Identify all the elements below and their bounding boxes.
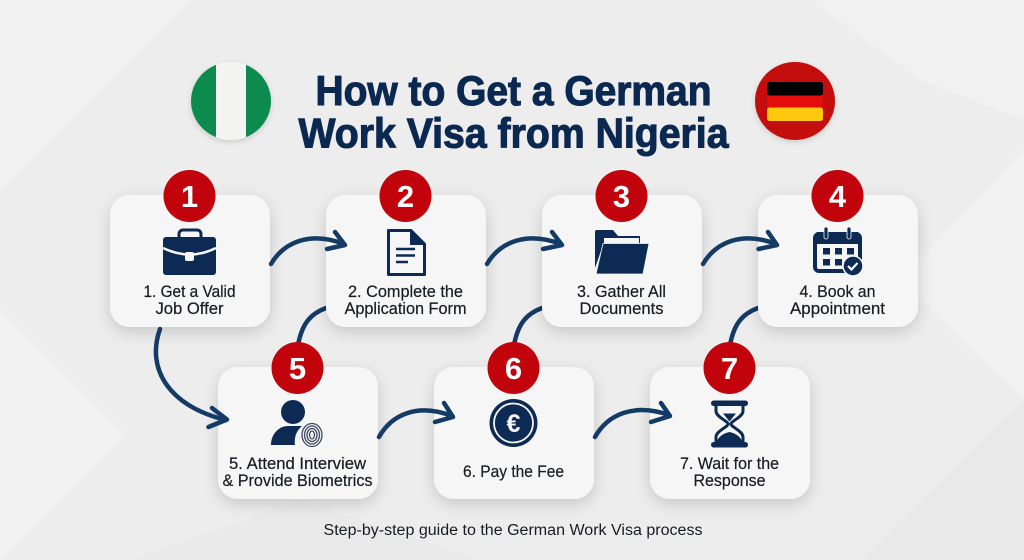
step number 1 xyxy=(164,170,216,222)
card 2: Complete the Application Form xyxy=(326,170,486,327)
step number 6: 6 xyxy=(505,351,522,386)
arrow: step 4 link down to step 7 xyxy=(730,308,758,345)
icon: briefcase xyxy=(163,230,216,275)
card 7: Wait for the Response xyxy=(650,342,810,499)
arrow: step 5 to step 6 xyxy=(379,403,453,437)
label 1 xyxy=(144,283,236,318)
icon: euro coin: € xyxy=(507,410,521,438)
icon: euro coin xyxy=(490,399,538,447)
label 5: 5. Attend Interview xyxy=(229,455,366,473)
caption: Step-by-step guide to the German Work Visa process xyxy=(324,522,703,539)
label 6: 6. Pay the Fee xyxy=(463,463,564,481)
step number 2 xyxy=(380,170,432,222)
step number 5 xyxy=(272,342,324,394)
step number 4 xyxy=(812,170,864,222)
label 7 xyxy=(680,455,779,490)
card 1: Get a Valid Job Offer xyxy=(110,170,270,327)
label 1: 1. Get a Valid xyxy=(144,283,236,301)
step number 6 xyxy=(488,342,540,394)
arrow: step 3 to step 4 xyxy=(703,232,777,264)
step number 3 xyxy=(596,170,648,222)
step number 2: 2 xyxy=(397,179,414,214)
label 7: Response xyxy=(694,472,766,490)
label 1: Job Offer xyxy=(156,300,224,318)
label 4 xyxy=(790,283,886,318)
icon: folder xyxy=(595,230,649,274)
step number 4: 4 xyxy=(829,179,847,214)
label 2 xyxy=(344,283,466,318)
icon: calendar with check xyxy=(815,227,863,276)
step number 7: 7 xyxy=(721,351,738,386)
label 2: 2. Complete the xyxy=(348,283,463,301)
step number 7 xyxy=(704,342,756,394)
label 4: 4. Book an xyxy=(800,283,876,301)
label 7: 7. Wait for the xyxy=(680,455,779,473)
label 3 xyxy=(577,283,666,318)
title: How to Get a German xyxy=(316,67,712,114)
card 4: Book an Appointment xyxy=(758,170,918,327)
icon: hourglass xyxy=(711,400,748,448)
arrow: step 1 to step 2 xyxy=(271,232,345,264)
title: Work Visa from Nigeria xyxy=(298,110,729,156)
arrow: step 1 to step 5 xyxy=(156,329,227,427)
arrow: step 6 to step 7 xyxy=(595,403,670,437)
step number 3: 3 xyxy=(613,179,630,214)
label 5: & Provide Biometrics xyxy=(222,472,372,490)
title xyxy=(298,67,729,156)
card 6: Pay the Fee xyxy=(434,342,594,499)
flag: Germany xyxy=(755,62,835,140)
label 5 xyxy=(222,455,372,490)
arrow: step 2 link down to step 5 xyxy=(298,308,326,345)
label 3: Documents xyxy=(580,300,664,318)
arrow: step 3 link down to step 6 xyxy=(514,308,542,345)
icon: document xyxy=(388,230,425,274)
label 3: 3. Gather All xyxy=(577,283,666,301)
label 4: Appointment xyxy=(790,300,886,318)
card 5: Attend Interview and Provide Biometrics xyxy=(218,342,378,499)
flag: Nigeria xyxy=(190,60,272,142)
step number 5: 5 xyxy=(289,351,306,386)
label 2: Application Form xyxy=(344,300,466,318)
arrow: step 2 to step 3 xyxy=(487,232,562,264)
card 3: Gather All Documents xyxy=(542,170,702,327)
icon: person with fingerprint xyxy=(271,400,325,448)
step number 1: 1 xyxy=(181,179,198,214)
